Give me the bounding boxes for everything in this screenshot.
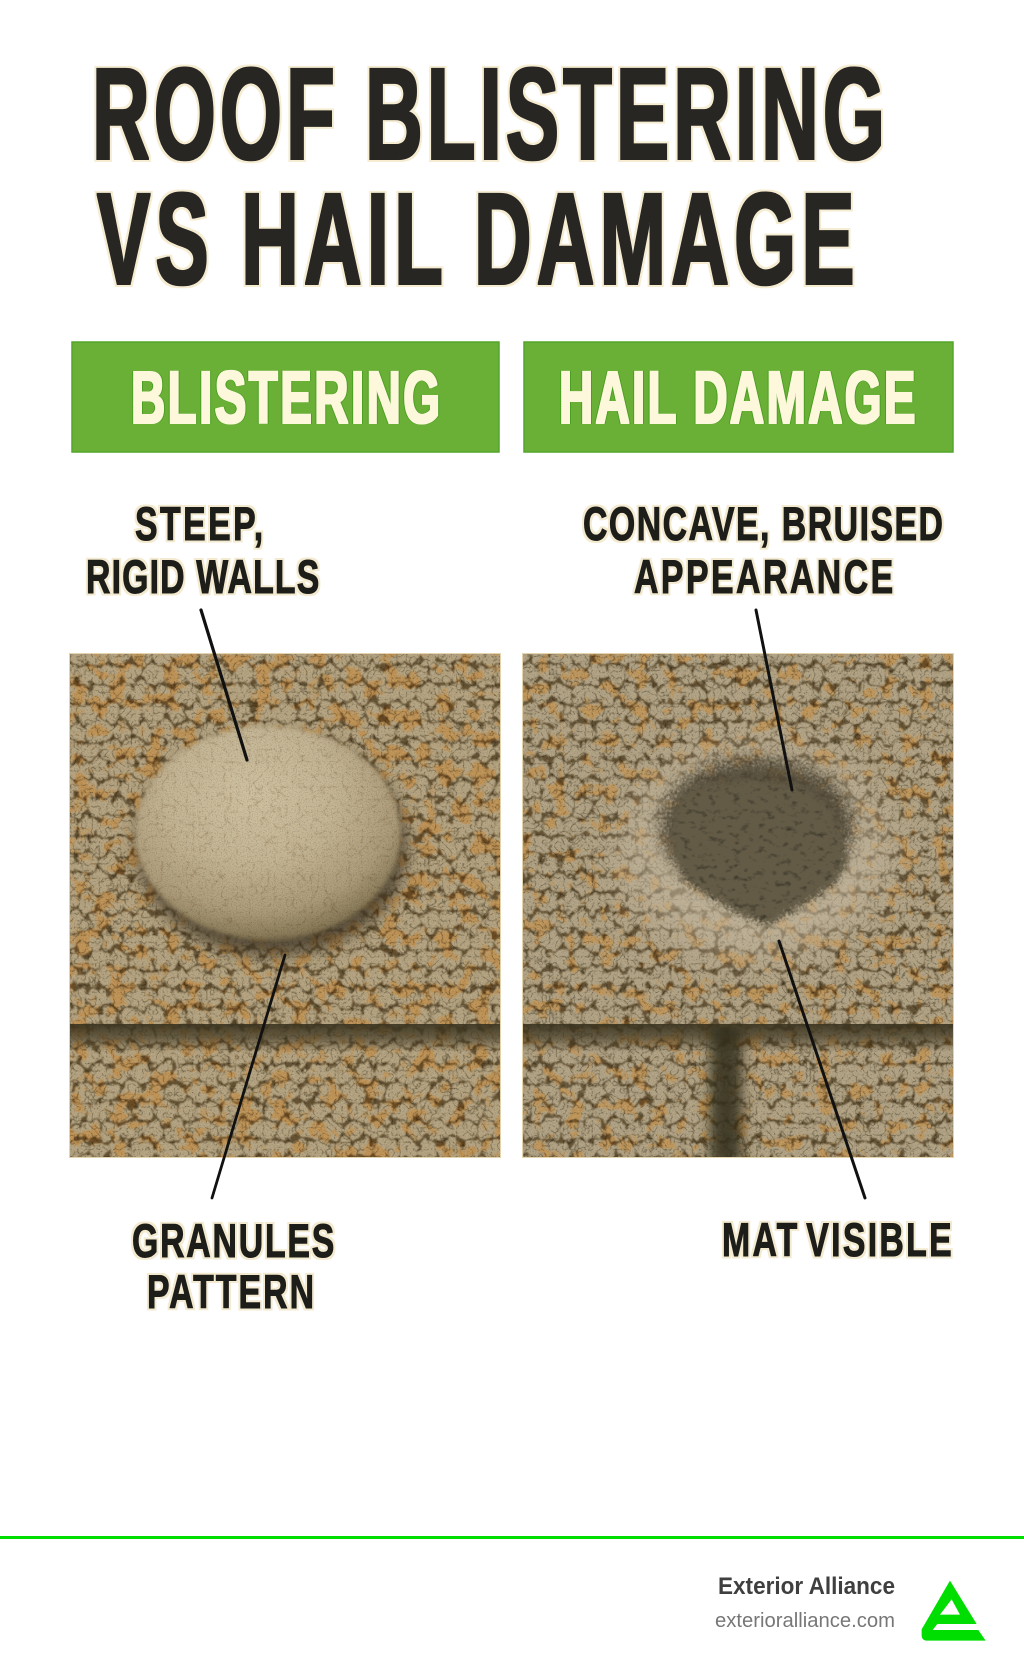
label: granules pattern [132, 1215, 334, 1318]
footer divider [0, 1536, 1024, 1539]
icon: exterior alliance logo [922, 1581, 986, 1641]
label: granules pattern: PATTERN [147, 1266, 314, 1318]
label: steep, rigid walls: STEEP, [135, 498, 263, 550]
panel header: hail damage [524, 342, 953, 452]
title [92, 41, 885, 312]
leader line: steep walls [201, 610, 247, 760]
label: granules pattern: GRANULES [132, 1215, 334, 1267]
label: concave, bruised appearance: APPEARANCE [634, 551, 893, 603]
photo: hail-damaged shingle [522, 653, 954, 1158]
panel header: hail damage: HAIL DAMAGE [559, 357, 915, 440]
panel header: blistering [72, 342, 499, 452]
hail bruise [672, 779, 846, 926]
footer brand text: Exterior Alliance [718, 1573, 895, 1600]
footer brand text: exterioralliance.com [715, 1610, 895, 1632]
leader line: concave appearance [756, 610, 792, 790]
label: concave, bruised appearance [583, 498, 943, 603]
label: steep, rigid walls: RIGID WALLS [86, 551, 319, 603]
photo: blistered shingle [69, 653, 501, 1158]
title: ROOF BLISTERING [92, 41, 885, 187]
label: steep, rigid walls [86, 498, 319, 603]
blister dome [135, 726, 401, 940]
leader line: granules pattern [212, 955, 285, 1198]
label: concave, bruised appearance: CONCAVE, BRUISED [583, 498, 943, 550]
leader line: mat visible [779, 941, 865, 1198]
panel header: blistering: BLISTERING [131, 357, 440, 440]
title: VS HAIL DAMAGE [97, 166, 855, 312]
label: mat visible: MAT VISIBLE [722, 1214, 952, 1266]
footer brand text [715, 1573, 895, 1632]
